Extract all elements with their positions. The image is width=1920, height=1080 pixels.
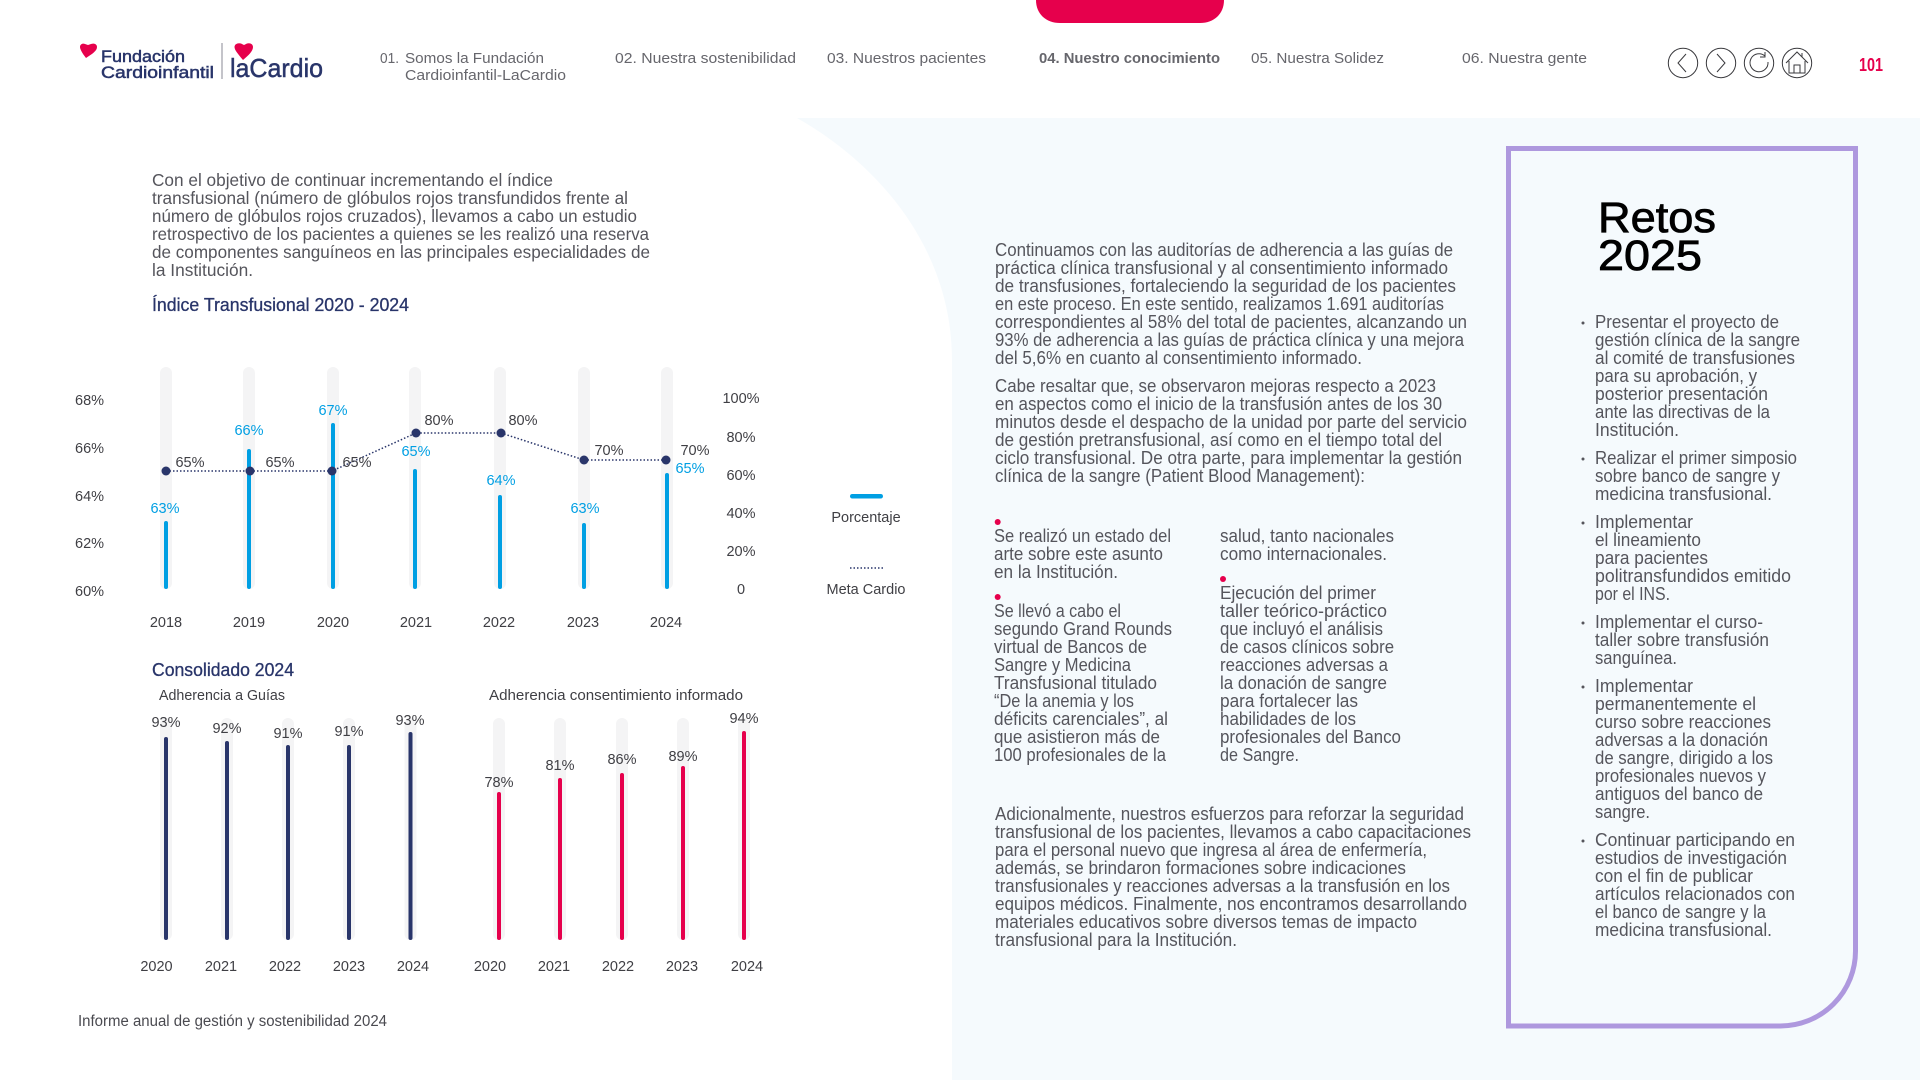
reto 5: sangre. (1595, 802, 1650, 822)
left axis labels: 60% (75, 584, 104, 600)
porcentaje value labels: 63% (150, 501, 180, 517)
nav item 01: Somos la Fundación (405, 51, 544, 67)
reto 6: el banco de sangre y la (1595, 902, 1767, 922)
text block: auditorías: de transfusiones, fortaleciendo la seguridad de los pacientes (995, 276, 1456, 296)
logo text: Fundación Cardioinfantil (101, 48, 214, 82)
intro paragraph: la Institución. (152, 260, 253, 280)
nav item 04 active: 04. Nuestro conocimiento (1039, 51, 1220, 67)
text block: mejoras: en aspectos como el inicio de la transfusión antes de los 30 (995, 394, 1442, 414)
text block: capacitaciones: Adicionalmente, nuestros esfuerzos para reforzar la seguridad (995, 804, 1464, 824)
bullet: Grand Rounds: salud, tanto nacionales (1220, 526, 1394, 546)
value labels: 94% (729, 711, 759, 727)
text block: capacitaciones: además, se brindaron formaciones sobre indicaciones (995, 858, 1406, 878)
year labels: 2022 (269, 959, 301, 975)
bullet: estado del arte (994, 519, 1171, 582)
text block: mejoras: clínica de la sangre (Patient Blood Management): (995, 466, 1365, 486)
reto 4 (1582, 612, 1769, 668)
page number: 101 (1859, 55, 1883, 75)
year labels: 2023 (567, 615, 599, 631)
legend: Porcentaje (831, 510, 901, 526)
logo text: laCardio: laCardio (230, 53, 323, 83)
bullet: Grand Rounds: virtual de Bancos de (994, 637, 1147, 657)
heading: Consolidado 2024: Consolidado 2024 (152, 660, 294, 680)
year labels: 2023 (333, 959, 365, 975)
bullet: Grand Rounds: que asistieron más de (994, 727, 1160, 747)
text block: auditorías: en este proceso. En este sentido, realizamos 1.691 auditorías (995, 294, 1444, 314)
reto 6: Continuar participando en (1595, 830, 1795, 850)
year labels: 2024 (397, 959, 429, 975)
footer: Informe anual de gestión y sostenibilidad 2024 (78, 1013, 387, 1030)
value labels: 93% (151, 715, 181, 731)
chart tracks (160, 367, 673, 589)
bullet: taller teórico-práctico: que incluyó el análisis (1220, 619, 1383, 639)
intro paragraph: transfusional (número de glóbulos rojos transfundidos frente al (152, 188, 628, 208)
text block: auditorías: del 5,6% en cuanto al consentimiento informado. (995, 348, 1362, 368)
right axis labels (722, 391, 760, 598)
meta cardio value labels (175, 413, 710, 471)
bullet: Grand Rounds: segundo Grand Rounds (994, 619, 1172, 639)
year labels: 2021 (400, 615, 432, 631)
porcentaje value labels: 64% (486, 473, 516, 489)
reto 1: posterior presentación (1595, 384, 1768, 404)
year labels: 2023 (666, 959, 698, 975)
reto 1: para su aprobación, y (1595, 366, 1757, 386)
reto 1: al comité de transfusiones (1595, 348, 1795, 368)
reto 2 (1582, 448, 1797, 504)
chart: Índice Transfusional (75, 367, 905, 631)
text block: capacitaciones: equipos médicos. Finalmente, nos encontramos desarrollando (995, 894, 1467, 914)
right axis labels: 100% (722, 391, 760, 407)
icon: refresh (1744, 48, 1774, 78)
text block: auditorías: 93% de adherencia a las guías de práctica clínica y una mejora (995, 330, 1465, 350)
reto 5: antiguos del banco de (1595, 784, 1763, 804)
bullet: taller teórico-práctico: profesionales del Banco (1220, 727, 1401, 747)
year labels: 2020 (474, 959, 506, 975)
reto 3: el lineamiento (1595, 530, 1701, 550)
bullet: taller teórico-práctico: reacciones adversas a (1220, 655, 1389, 675)
right axis labels: 40% (726, 506, 756, 522)
text block: mejoras: ciclo transfusional. De otra parte, para implementar la gestión (995, 448, 1462, 468)
legend (827, 494, 905, 598)
intro paragraph: número de glóbulos rojos cruzados), llevamos a cabo un estudio (152, 206, 637, 226)
text block: mejoras: minutos desde el despacho de la unidad por parte del servicio (995, 412, 1467, 432)
reto 3: Implementar (1595, 512, 1693, 532)
meta cardio value labels: 70% (594, 443, 624, 459)
reto 3: politransfundidos emitido (1595, 566, 1791, 586)
value labels (151, 713, 425, 742)
text block: auditorías: correspondientes al 58% del total de pacientes, alcanzando un (995, 312, 1467, 332)
nav item 05: 05. Nuestra Solidez (1251, 51, 1384, 67)
text block: capacitaciones: transfusional para la Institución. (995, 930, 1237, 950)
reto 1: gestión clínica de la sangre (1595, 330, 1800, 350)
year labels: 2022 (483, 615, 515, 631)
bullet: Grand Rounds: Se llevó a cabo el (994, 601, 1121, 621)
bullet: taller teórico-práctico: taller teórico-práctico (1220, 601, 1387, 621)
panel title: 2025 (1598, 232, 1702, 280)
icon: forward (1706, 48, 1736, 78)
year labels: 2018 (150, 615, 182, 631)
reto 2: medicina transfusional. (1595, 484, 1772, 504)
value labels: 78% (484, 775, 514, 791)
year labels (474, 959, 763, 975)
chart title: Adherencia consentimiento informado (489, 688, 743, 704)
reto 5: permanentemente el (1595, 694, 1756, 714)
reto 1: ante las directivas de la (1595, 402, 1771, 422)
intro paragraph (152, 170, 650, 280)
value labels: 91% (334, 724, 364, 740)
value labels: 93% (395, 713, 425, 729)
meta cardio value labels: 65% (175, 455, 205, 471)
year labels: 2020 (140, 959, 173, 975)
bullet: Grand Rounds: Transfusional titulado (994, 673, 1157, 693)
bullet: Grand Rounds: 100 profesionales de la (994, 745, 1167, 765)
porcentaje value labels: 65% (401, 444, 431, 460)
reto 6: estudios de investigación (1595, 848, 1787, 868)
meta cardio value labels: 65% (342, 455, 372, 471)
reto 4: sanguínea. (1595, 648, 1677, 668)
text block: mejoras: de gestión pretransfusional, así como en el tiempo total del (995, 430, 1442, 450)
icon: heart Fundación (80, 44, 97, 58)
icon: heart laCardio (234, 43, 253, 60)
year labels: 2020 (317, 615, 349, 631)
left axis labels: 66% (75, 441, 104, 457)
intro paragraph: retrospectivo de los pacientes a quienes se les realizó una reserva (152, 224, 649, 244)
text block: capacitaciones: para el personal nuevo que ingresa al área de enfermería, (995, 840, 1427, 860)
reto 6: con el fin de publicar (1595, 866, 1753, 886)
reto 3 (1582, 512, 1791, 604)
panel title: Retos (1598, 194, 1716, 242)
left axis labels: 64% (75, 489, 104, 505)
intro paragraph: Con el objetivo de continuar incrementando el índice (152, 170, 553, 190)
year labels: 2021 (538, 959, 570, 975)
bullet: Grand Rounds: déficits carenciales”, al (994, 709, 1168, 729)
bullet: taller teórico-práctico: Ejecución del primer (1220, 583, 1376, 603)
value labels: 86% (607, 752, 637, 768)
value labels: 81% (545, 758, 575, 774)
reto 3: para pacientes (1595, 548, 1708, 568)
reto 4: taller sobre transfusión (1595, 630, 1769, 650)
chart bars: porcentaje (164, 423, 669, 589)
bullet: Grand Rounds: como internacionales. (1220, 544, 1387, 564)
bullet: taller teórico-práctico: de Sangre. (1220, 745, 1299, 765)
porcentaje value labels (150, 403, 705, 517)
panel border (1508, 148, 1856, 1026)
bullet list: acciones (994, 519, 1401, 765)
nav item 03: 03. Nuestros pacientes (827, 51, 986, 67)
logo text: Fundación Cardioinfantil: Fundación (101, 48, 185, 66)
bullet: Grand Rounds: Sangre y Medicina (994, 655, 1132, 675)
year labels: 2019 (233, 615, 265, 631)
reto 6: artículos relacionados con (1595, 884, 1795, 904)
meta cardio value labels: 80% (508, 413, 538, 429)
bars (164, 732, 412, 940)
logo text: Fundación Cardioinfantil: Cardioinfantil (101, 64, 214, 82)
bullet: Grand Rounds (994, 526, 1394, 765)
value labels (484, 711, 759, 791)
meta cardio value labels: 70% (680, 443, 710, 459)
nav item 02: 02. Nuestra sostenibilidad (615, 51, 796, 67)
list: retos (1582, 312, 1800, 940)
reto 5: de sangre, dirigido a los (1595, 748, 1773, 768)
reto 6: medicina transfusional. (1595, 920, 1772, 940)
nav item 06: 06. Nuestra gente (1462, 51, 1587, 67)
navigation menu (380, 51, 1587, 84)
bars (497, 731, 746, 940)
right axis labels: 0 (737, 582, 745, 598)
navigation icons (1668, 48, 1812, 78)
bullet: estado del arte: Se realizó un estado del (994, 526, 1171, 546)
reto 2: sobre banco de sangre y (1595, 466, 1780, 486)
reto 6 (1582, 830, 1795, 940)
reto 3: por el INS. (1595, 584, 1670, 604)
nav item 01: 01. (380, 51, 399, 67)
reto 1: Institución. (1595, 420, 1679, 440)
bullet: taller teórico-práctico (1220, 576, 1401, 765)
reto 1 (1582, 312, 1800, 440)
reto 5: profesionales nuevos y (1595, 766, 1766, 786)
text block: capacitaciones: transfusionales y reacciones adversas a la transfusión en los (995, 876, 1450, 896)
background panel (797, 118, 1920, 1080)
heading: Índice Transfusional: Índice Transfusional 2020 - 2024 (152, 295, 409, 315)
left axis labels: 62% (75, 536, 104, 552)
left axis labels: 68% (75, 393, 104, 409)
text block: capacitaciones (995, 804, 1471, 950)
chart: Adherencia a Guías (140, 688, 429, 975)
reto 5 (1582, 676, 1773, 822)
porcentaje value labels: 66% (234, 423, 264, 439)
nav item 01: Cardioinfantil-LaCardio (405, 68, 566, 84)
year labels: 2024 (731, 959, 763, 975)
text block: auditorías: Continuamos con las auditorías de adherencia a las guías de (995, 240, 1453, 260)
legend: Meta Cardio (827, 582, 905, 598)
reto 5: adversas a la donación (1595, 730, 1768, 750)
text block: capacitaciones: materiales educativos sobre diversos temas de impacto (995, 912, 1417, 932)
bullet: taller teórico-práctico: de casos clínicos sobre (1220, 637, 1394, 657)
text block: auditorías: práctica clínica transfusional y al consentimiento informado (995, 258, 1448, 278)
year labels: 2022 (602, 959, 634, 975)
porcentaje value labels: 63% (570, 501, 600, 517)
tracks (493, 718, 750, 940)
value labels: 89% (668, 749, 698, 765)
year labels (140, 959, 429, 975)
right axis labels: 20% (726, 544, 756, 560)
year labels: 2024 (650, 615, 682, 631)
porcentaje value labels: 65% (675, 461, 705, 477)
logo (80, 43, 323, 83)
tracks (160, 718, 416, 940)
intro paragraph: de componentes sanguíneos en las principales especialidades de (152, 242, 650, 262)
meta cardio value labels: 80% (424, 413, 454, 429)
icon: home (1782, 48, 1812, 78)
text block: mejoras (995, 376, 1467, 486)
text block: capacitaciones: transfusional de los pacientes, llevamos a cabo capacitaciones (995, 822, 1471, 842)
text block: mejoras: Cabe resaltar que, se observaron mejoras respecto a 2023 (995, 376, 1436, 396)
year labels: 2021 (205, 959, 237, 975)
chart title: Adherencia a Guías (159, 688, 285, 704)
bullet: taller teórico-práctico: habilidades de los (1220, 709, 1356, 729)
active section tab (1036, 0, 1224, 23)
reto 1: Presentar el proyecto de (1595, 312, 1779, 332)
chart: Adherencia consentimiento informado (474, 688, 763, 975)
reto 5: curso sobre reacciones (1595, 712, 1771, 732)
icon: back (1668, 48, 1698, 78)
year labels (150, 615, 682, 631)
panel title (1598, 194, 1716, 280)
bullet: taller teórico-práctico: para fortalecer las (1220, 691, 1358, 711)
bullet: estado del arte: arte sobre este asunto (994, 544, 1163, 564)
reto 4: Implementar el curso- (1595, 612, 1763, 632)
meta cardio line (162, 428, 670, 476)
right axis labels: 80% (726, 430, 756, 446)
bullet: taller teórico-práctico: la donación de sangre (1220, 673, 1387, 693)
left axis labels (75, 393, 104, 600)
text block: auditorías (995, 240, 1467, 368)
bullet: Grand Rounds: “De la anemia y los (994, 691, 1134, 711)
value labels: 91% (273, 726, 303, 742)
porcentaje value labels: 67% (318, 403, 348, 419)
nav item 01 (380, 51, 566, 84)
value labels: 92% (212, 721, 242, 737)
bullet: estado del arte: en la Institución. (994, 562, 1118, 582)
panel: Retos 2025 (1508, 148, 1856, 1026)
reto 2: Realizar el primer simposio (1595, 448, 1797, 468)
right axis labels: 60% (726, 468, 756, 484)
logo separator (222, 43, 223, 79)
meta cardio value labels: 65% (265, 455, 295, 471)
reto 5: Implementar (1595, 676, 1693, 696)
